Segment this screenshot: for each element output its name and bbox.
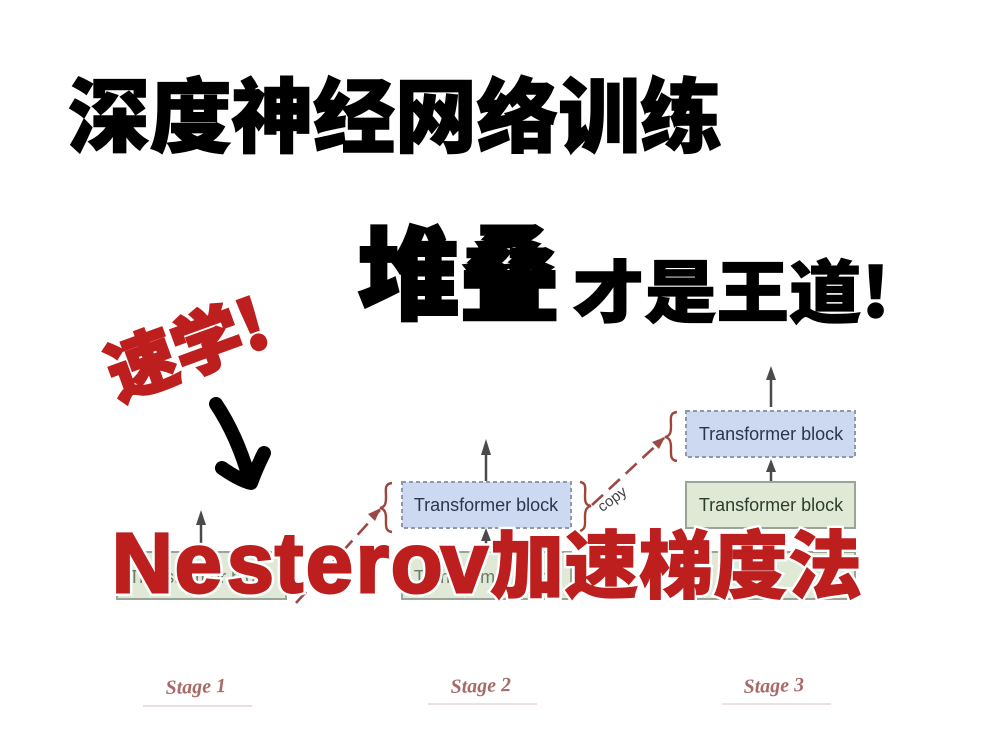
icon: hand-drawn arrow bbox=[216, 404, 264, 483]
headline: is the way: 才是王道! bbox=[572, 238, 890, 337]
stage 3 top block bbox=[686, 411, 855, 457]
stage 3 top block: Transformer block bbox=[699, 424, 844, 444]
dashed arrow: stage 2 to stage 3 bbox=[592, 437, 665, 505]
headline thickening: Nesterov bbox=[112, 516, 488, 610]
arrow: stage 2 inner bbox=[481, 528, 491, 552]
arrow: stage 3 inner bbox=[766, 459, 776, 481]
diagram: stage 3 bbox=[580, 366, 855, 705]
brace: stage 3 bbox=[665, 412, 677, 461]
stage 3 label bbox=[722, 674, 831, 705]
stage 2 top block bbox=[402, 482, 571, 528]
stage 1 label: Stage 1 bbox=[165, 675, 226, 699]
latin part: Nesterov bbox=[112, 516, 488, 610]
stage 2 top block: Transformer block bbox=[414, 495, 559, 515]
stage 1 block: Transformer block bbox=[129, 567, 274, 587]
stage 3 middle block bbox=[686, 482, 855, 528]
stage 2 bottom block bbox=[402, 552, 571, 599]
stage 3 middle block: Transformer block bbox=[699, 495, 844, 515]
chinese part: 加速梯度法 bbox=[490, 507, 862, 614]
brace: stage 2 right bbox=[580, 482, 591, 531]
brace: stage 2 bbox=[380, 483, 392, 532]
stage 1 label bbox=[143, 675, 252, 707]
stage 3 bottom block bbox=[686, 552, 855, 599]
arrow: stage 3 output bbox=[766, 366, 776, 407]
stage 2 label: Stage 2 bbox=[450, 674, 511, 698]
headline thickening bbox=[112, 507, 862, 614]
headline thickening: 加速梯度法 bbox=[490, 507, 862, 614]
arrow: stage 2 output bbox=[481, 439, 491, 481]
arrow: stage 1 output bbox=[196, 510, 206, 548]
diagram: stage 1 bbox=[117, 510, 286, 707]
sticker: quick learn: 速学! bbox=[91, 269, 281, 419]
headline: Nesterov accelerated gradient bbox=[112, 507, 862, 614]
diagram: stage 2 bbox=[296, 439, 571, 705]
copy label: copy bbox=[595, 483, 631, 516]
title: 深度神经网络训练 bbox=[68, 53, 722, 170]
headline: stacking: 堆叠 bbox=[358, 195, 560, 341]
dashed arrow: stage 1 to stage 2 bbox=[296, 508, 381, 603]
stage 2 bottom block: Transformer block bbox=[414, 567, 559, 587]
stage 2 label bbox=[428, 674, 537, 705]
stage 1 block bbox=[117, 552, 286, 599]
stage 3 label: Stage 3 bbox=[743, 674, 804, 698]
